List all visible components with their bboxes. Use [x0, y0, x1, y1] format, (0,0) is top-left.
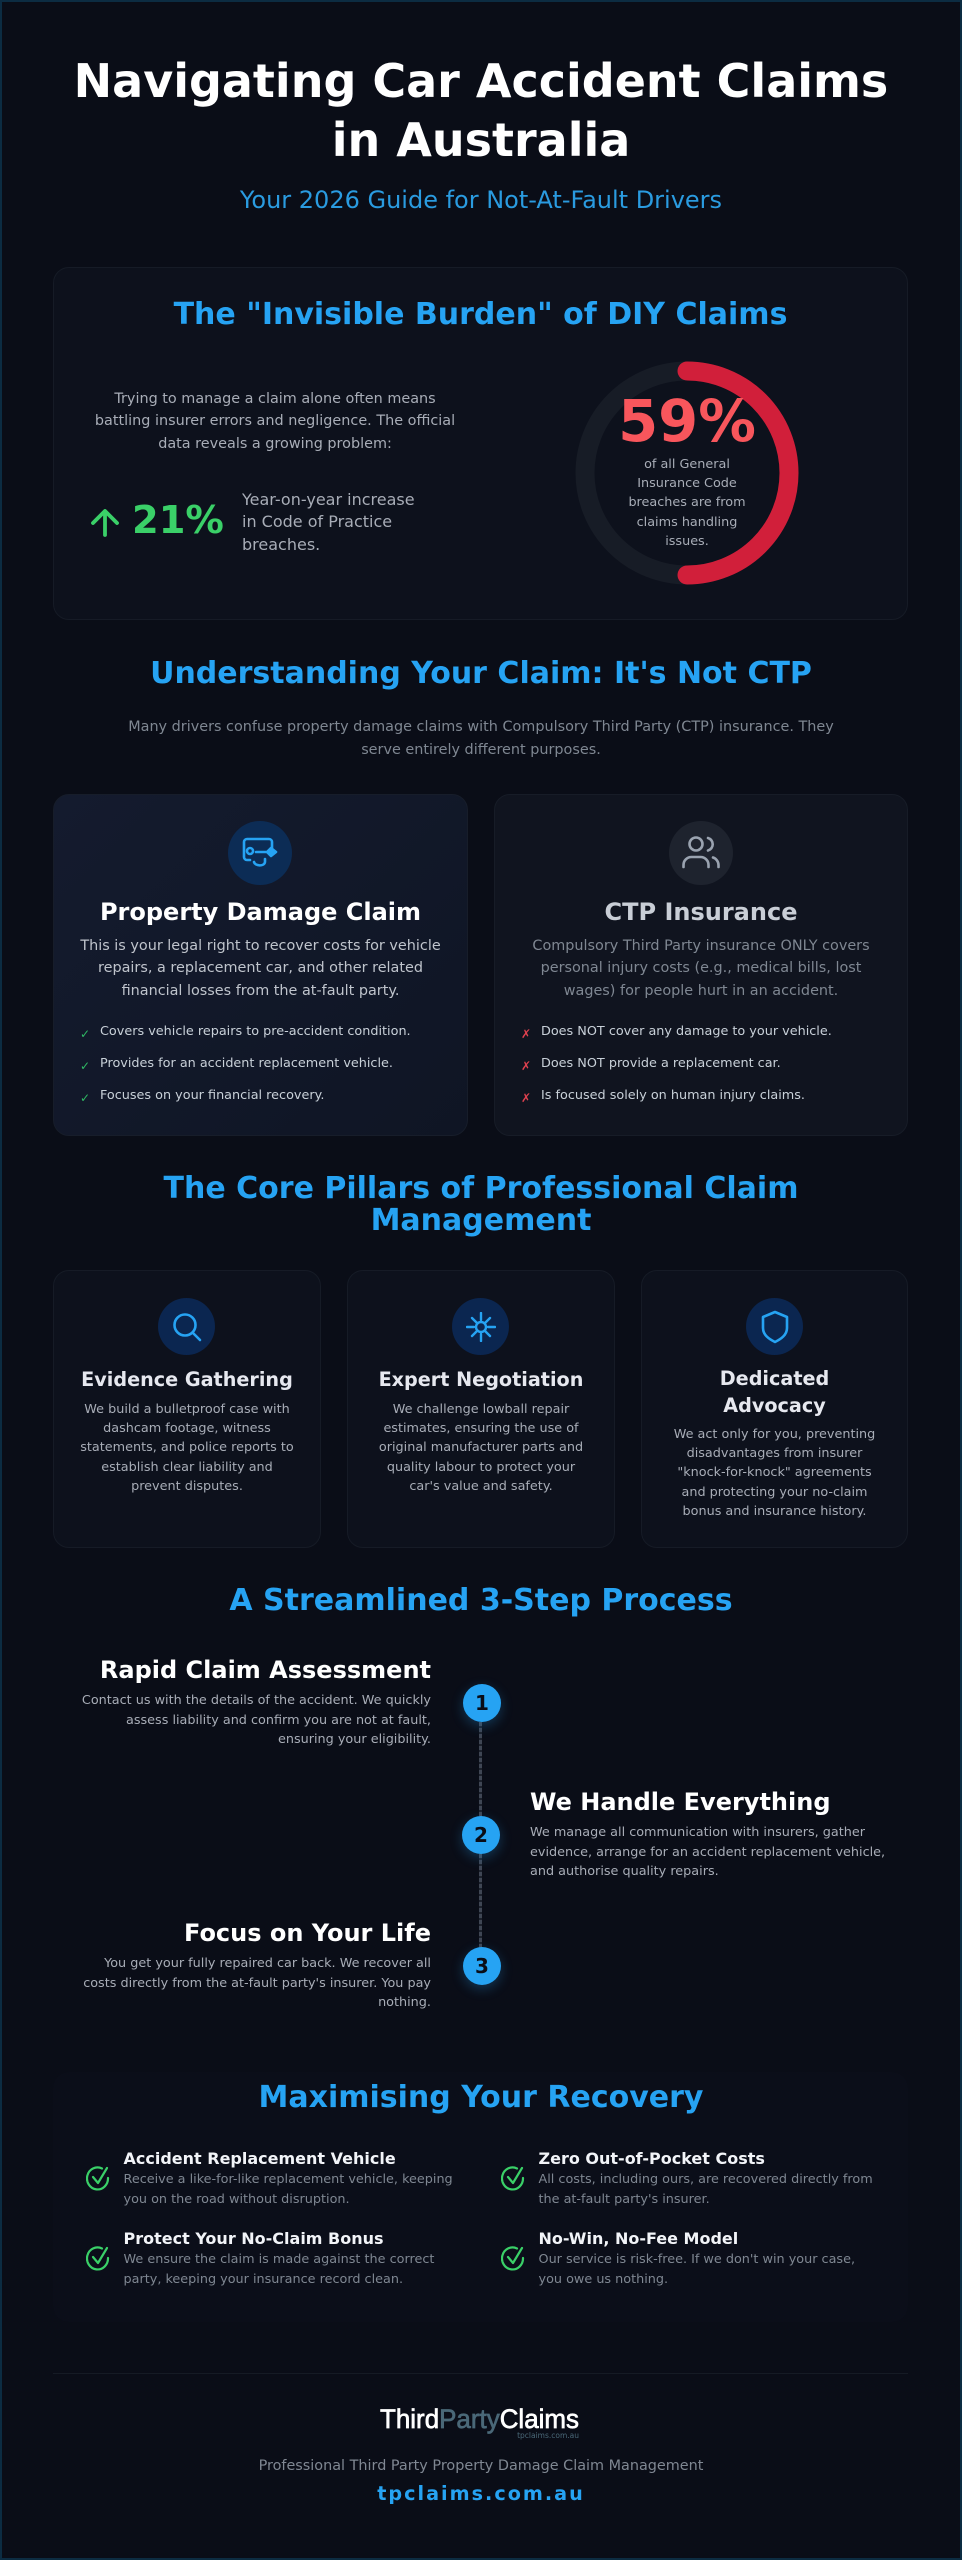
panel: invisible burden: [53, 267, 908, 620]
heading: core pillars: [164, 1171, 798, 1238]
text: step 2 description: We manage all communication with insurers, gather: [530, 1825, 865, 1840]
text: benefit description: We ensure the claim is made against the correct: [124, 2252, 434, 2267]
heading: dedicated advocacy: Dedicated: [720, 1367, 829, 1390]
text: understanding intro: [128, 719, 834, 758]
heading: benefit title: Accident Replacement Vehicle: [124, 2149, 396, 2168]
panel: evidence gathering: [53, 1270, 321, 1548]
step marker 3: 3: [475, 1954, 489, 1978]
text: stat description: Year-on-year increase: [242, 490, 415, 509]
text: intro paragraph: data reveals a growing problem:: [158, 436, 392, 452]
text: benefit description: Our service is risk-free. If we don't win your case,: [538, 2252, 855, 2267]
text: negotiation description: [379, 1402, 583, 1494]
list: property damage benefits: ✓: [80, 1027, 90, 1041]
text: advocacy description: disadvantages from insurer: [687, 1446, 862, 1461]
text: step 3 description: costs directly from the at-fault party's insurer. You pay: [83, 1976, 431, 1990]
stat: 21 percent: 21%: [132, 498, 224, 543]
text: donut caption: Insurance Code: [637, 476, 737, 491]
benefit: protect no-claim bonus: [86, 2229, 434, 2286]
text: step 1 description: Contact us with the details of the accident. We quickly: [82, 1693, 431, 1708]
heading: core pillars: The Core Pillars of Professional Claim: [164, 1171, 798, 1206]
item: financial recovery: Focuses on your financial recovery.: [100, 1088, 324, 1103]
list: property damage benefits: [80, 1024, 411, 1105]
benefit: accident replacement vehicle: [86, 2149, 453, 2206]
icon: sun gear: [452, 1298, 509, 1355]
heading: 3-step process: A Streamlined 3-Step Process: [229, 1583, 733, 1618]
panel: CTP insurance: [494, 794, 908, 1136]
icon: car damage: [228, 821, 292, 885]
text: evidence description: prevent disputes.: [131, 1479, 243, 1494]
text: benefit description: Receive a like-for-like replacement vehicle, keeping: [124, 2172, 453, 2187]
text: negotiation description: car's value and safety.: [409, 1479, 553, 1494]
text: benefit description: you owe us nothing.: [538, 2272, 668, 2286]
text: donut caption: claims handling: [637, 515, 737, 530]
item: covers repairs: Covers vehicle repairs to pre-accident condition.: [100, 1024, 411, 1039]
step marker 2: 2: [474, 1823, 488, 1847]
text: step 2 description: [530, 1825, 885, 1879]
text: advocacy description: bonus and insurance history.: [683, 1504, 866, 1519]
text: property damage description: repairs, a replacement car, and other related: [98, 960, 423, 976]
text: negotiation description: estimates, ensuring the use of: [383, 1421, 579, 1436]
text: step 3 description: You get your fully repaired car back. We recover all: [104, 1956, 431, 1971]
text: footer tagline: Professional Third Party Property Damage Claim Management: [259, 2458, 703, 2474]
logo: Third Party Claims: ThirdPartyClaims: [380, 2404, 579, 2434]
text: stat description: in Code of Practice: [242, 512, 392, 531]
text: evidence description: establish clear liability and: [101, 1460, 273, 1475]
heading: step 2: We Handle Everything: [530, 1788, 831, 1816]
list: CTP limits: ✗: [521, 1027, 531, 1041]
text: step 1 description: assess liability and confirm you are not at fault,: [126, 1712, 431, 1728]
text: intro paragraph: battling insurer errors and negligence. The official: [95, 413, 455, 429]
subtitle: Your 2026 Guide for Not-At-Fault Drivers: [240, 186, 722, 214]
heading: property damage claim: Property Damage Claim: [100, 898, 421, 926]
step marker 1: [463, 1684, 501, 1722]
text: step 1 description: [82, 1693, 431, 1747]
heading: expert negotiation: Expert Negotiation: [379, 1368, 583, 1391]
item: no replacement car: Does NOT provide a replacement car.: [541, 1056, 781, 1071]
item: human injury only: Is focused solely on human injury claims.: [541, 1088, 805, 1103]
icon: check: [501, 2246, 524, 2270]
text: benefit description: the at-fault party's insurer.: [538, 2192, 710, 2206]
step 3: focus on your life: [83, 1919, 431, 2010]
heading: evidence gathering: Evidence Gathering: [81, 1368, 293, 1391]
text: negotiation description: quality labour to protect your: [387, 1460, 575, 1475]
text: donut caption: issues.: [665, 534, 709, 549]
heading: understanding: Understanding Your Claim: It's Not CTP: [150, 656, 812, 691]
heading: step 1: Rapid Claim Assessment: [100, 1656, 431, 1684]
text: donut caption: [628, 457, 746, 549]
step marker 3: [463, 1947, 501, 1985]
text: stat description: [242, 490, 415, 554]
list: property damage benefits: ✓: [80, 1059, 90, 1073]
icon: check: [86, 2166, 110, 2190]
icon: check: [501, 2166, 524, 2190]
heading: benefit title: No-Win, No-Fee Model: [538, 2229, 738, 2248]
text: intro paragraph: [95, 391, 455, 452]
text: understanding intro: Many drivers confuse property damage claims with Compulsory Third Party (CTP) insurance. They: [128, 719, 834, 735]
link: website: tpclaims.com.au: [377, 2482, 585, 2505]
heading: step 3: Focus on Your Life: [184, 1919, 431, 1947]
item: replacement vehicle: Provides for an accident replacement vehicle.: [100, 1056, 393, 1071]
text: step 3 description: nothing.: [378, 1995, 431, 2010]
text: step 3 description: [83, 1956, 431, 2010]
text: benefit description: you on the road without disruption.: [124, 2192, 350, 2206]
step 2: we handle everything: [530, 1788, 885, 1879]
text: CTP description: personal injury costs (e.g., medical bills, lost: [541, 960, 861, 976]
heading: core pillars: Management: [371, 1203, 591, 1238]
text: evidence description: statements, and police reports to: [80, 1440, 294, 1455]
heading: CTP insurance: CTP Insurance: [605, 898, 797, 926]
benefit: zero out-of-pocket costs: [501, 2149, 873, 2206]
heading: benefit title: Protect Your No-Claim Bonus: [124, 2229, 384, 2248]
text: evidence description: dashcam footage, witness: [103, 1421, 271, 1436]
heading: dedicated advocacy: Advocacy: [723, 1394, 826, 1416]
text: benefit description: [124, 2252, 434, 2286]
text: step 2 description: and authorise quality repairs.: [530, 1864, 719, 1879]
text: benefit description: [124, 2172, 453, 2206]
chart: donut 59 percent: [576, 362, 798, 584]
text: advocacy description: and protecting your no-claim: [682, 1485, 867, 1500]
icon: people: [669, 821, 733, 885]
list: CTP limits: [521, 1024, 832, 1105]
text: CTP description: [532, 938, 870, 999]
panel: maximising recovery: [53, 2072, 908, 2322]
timeline: connector line: [479, 1722, 482, 1950]
item: no vehicle damage: Does NOT cover any damage to your vehicle.: [541, 1024, 832, 1039]
text: step 1 description: ensuring your eligibility.: [278, 1732, 431, 1747]
list: CTP limits: ✗: [521, 1059, 531, 1073]
text: property damage description: financial losses from the at-fault party.: [122, 983, 399, 999]
heading: maximising recovery: Maximising Your Recovery: [259, 2080, 703, 2115]
text: negotiation description: original manufacturer parts and: [379, 1440, 583, 1455]
icon: check: [86, 2246, 110, 2270]
text: evidence description: [80, 1402, 294, 1494]
text: advocacy description: "knock-for-knock" agreements: [677, 1465, 872, 1480]
text: benefit description: [538, 2172, 873, 2206]
heading: benefit title: Zero Out-of-Pocket Costs: [538, 2149, 765, 2168]
title: in Australia: [332, 113, 630, 167]
logo: Third Party Claims: tpclaims.com.au: [517, 2431, 579, 2440]
heading: invisible burden: The "Invisible Burden" of DIY Claims: [174, 297, 787, 332]
text: intro paragraph: Trying to manage a claim alone often means: [114, 391, 436, 407]
panel: property damage claim: [53, 794, 468, 1136]
icon: up arrow: [91, 509, 119, 537]
text: CTP description: Compulsory Third Party insurance ONLY covers: [532, 938, 870, 954]
step marker 1: 1: [475, 1691, 489, 1715]
text: advocacy description: We act only for you, preventing: [674, 1427, 875, 1442]
stat: 59 percent: 59%: [618, 388, 756, 455]
text: step 2 description: evidence, arrange for an accident replacement vehicle,: [530, 1844, 885, 1860]
icon: shield: [746, 1298, 803, 1355]
text: benefit description: [538, 2252, 855, 2286]
text: negotiation description: We challenge lowball repair: [393, 1402, 569, 1417]
icon: magnifier: [158, 1298, 215, 1355]
text: donut caption: breaches are from: [628, 495, 746, 510]
panel: dedicated advocacy: [641, 1270, 908, 1548]
text: advocacy description: [674, 1427, 875, 1519]
list: CTP limits: ✗: [521, 1091, 531, 1105]
text: donut caption: of all General: [644, 457, 730, 472]
title: Navigating Car Accident Claims: [74, 54, 888, 108]
text: CTP description: wages) for people hurt in an accident.: [564, 983, 838, 999]
text: benefit description: party, keeping your insurance record clean.: [124, 2272, 403, 2286]
list: property damage benefits: ✓: [80, 1091, 90, 1105]
text: evidence description: We build a bulletproof case with: [84, 1402, 290, 1417]
benefit: no-win no-fee: [501, 2229, 855, 2286]
title: [74, 54, 888, 167]
text: property damage description: This is your legal right to recover costs for vehicle: [80, 938, 441, 954]
step 1: rapid claim assessment: [82, 1656, 431, 1747]
heading: dedicated advocacy: [720, 1367, 829, 1416]
text: benefit description: All costs, including ours, are recovered directly from: [538, 2172, 873, 2187]
text: property damage description: [80, 938, 441, 999]
text: understanding intro: serve entirely different purposes.: [361, 742, 601, 758]
step marker 2: [462, 1816, 500, 1854]
panel: expert negotiation: [347, 1270, 615, 1548]
text: stat description: breaches.: [242, 535, 320, 554]
